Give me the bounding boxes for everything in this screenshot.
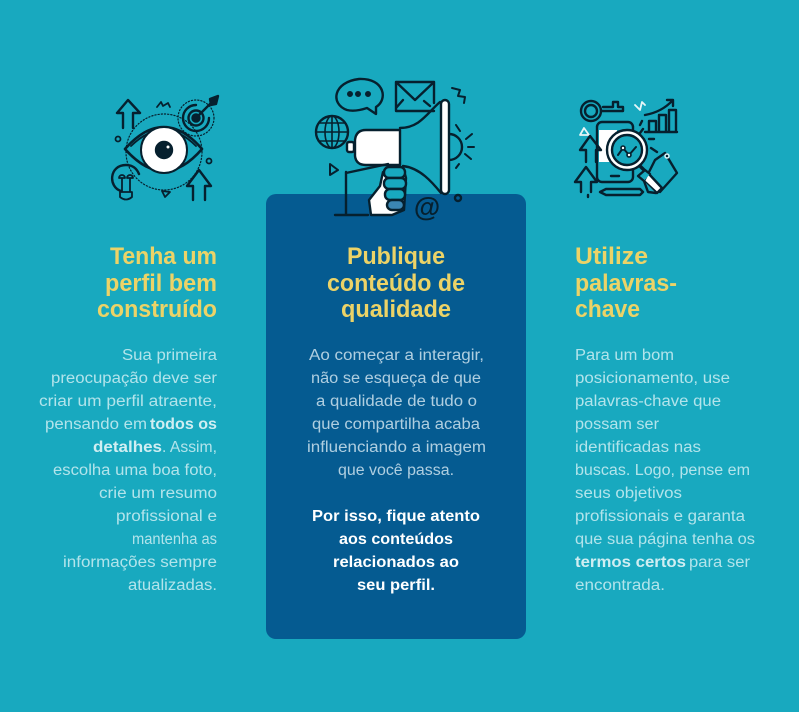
- heading: right column: Utilize: [575, 243, 648, 270]
- icon: at sign: @: [414, 192, 440, 222]
- heading: center column: Publique: [347, 243, 445, 270]
- text block: left column: [39, 347, 217, 594]
- text block: center column: que compartilha acaba: [312, 416, 480, 433]
- text block: left column: atualizadas.: [128, 577, 217, 594]
- text block: left column: crie um resumo: [99, 485, 217, 502]
- text block: left column: preocupação deve ser: [51, 370, 217, 387]
- text block: left column: . Assim,: [162, 439, 217, 456]
- heading: right column: palavras-: [575, 270, 677, 297]
- text block: right column: palavras-chave que: [575, 393, 721, 410]
- text block: right column: buscas. Logo, pense em: [575, 462, 750, 479]
- icon: magnifier and phone: [575, 100, 677, 197]
- text block: left column: pensando em: [45, 416, 147, 433]
- text block: right column: posicionamento, use: [575, 370, 730, 387]
- text block: right column: identificadas nas: [575, 439, 701, 456]
- heading: right column: chave: [575, 296, 640, 323]
- text block: left column: informações sempre: [63, 554, 217, 571]
- icon: eye: [112, 96, 218, 200]
- text block: left column: criar um perfil atraente,: [39, 393, 217, 410]
- text block: left column: mantenha as: [132, 531, 217, 548]
- text block: right column: para ser: [689, 554, 750, 571]
- text block: right column: termos certos: [575, 554, 686, 571]
- text block: right column: [575, 347, 755, 594]
- text block: left column: escolha uma boa foto,: [53, 462, 217, 479]
- heading: left column: [97, 243, 217, 323]
- text block: center column: a qualidade de tudo o: [316, 393, 477, 410]
- text block: left column: detalhes: [93, 439, 162, 456]
- heading: center column: [327, 243, 465, 323]
- text block: right column: encontrada.: [575, 577, 665, 594]
- text block: center column: que você passa.: [338, 462, 454, 479]
- callout: center column: relacionados ao: [333, 554, 459, 571]
- callout: center column: [312, 508, 480, 594]
- text block: center column: não se esqueça de que: [311, 370, 481, 387]
- text block: right column: possam ser: [575, 416, 659, 433]
- callout: center column: seu perfil.: [357, 577, 435, 594]
- callout: center column: aos conteúdos: [339, 531, 453, 548]
- text block: right column: seus objetivos: [575, 485, 682, 502]
- heading: right column: [575, 243, 677, 323]
- heading: left column: perfil bem: [105, 270, 217, 297]
- icon: megaphone: [316, 79, 474, 215]
- heading: left column: construído: [97, 296, 217, 323]
- text block: left column: profissional e: [116, 508, 217, 525]
- text block: left column: Sua primeira: [122, 347, 217, 364]
- heading: center column: qualidade: [341, 296, 451, 323]
- text block: right column: que sua página tenha os: [575, 531, 755, 548]
- text block: center column: influenciando a imagem: [307, 439, 486, 456]
- text block: center column: [307, 347, 486, 479]
- text block: center column: Ao começar a interagir,: [309, 347, 484, 364]
- heading: left column: Tenha um: [110, 243, 217, 270]
- text block: right column: profissionais e garanta: [575, 508, 745, 525]
- callout: center column: Por isso, fique atento: [312, 508, 480, 525]
- panel: central card: [266, 194, 526, 639]
- text block: left column: todos os: [150, 416, 217, 433]
- heading: center column: conteúdo de: [327, 270, 465, 297]
- text block: right column: Para um bom: [575, 347, 674, 364]
